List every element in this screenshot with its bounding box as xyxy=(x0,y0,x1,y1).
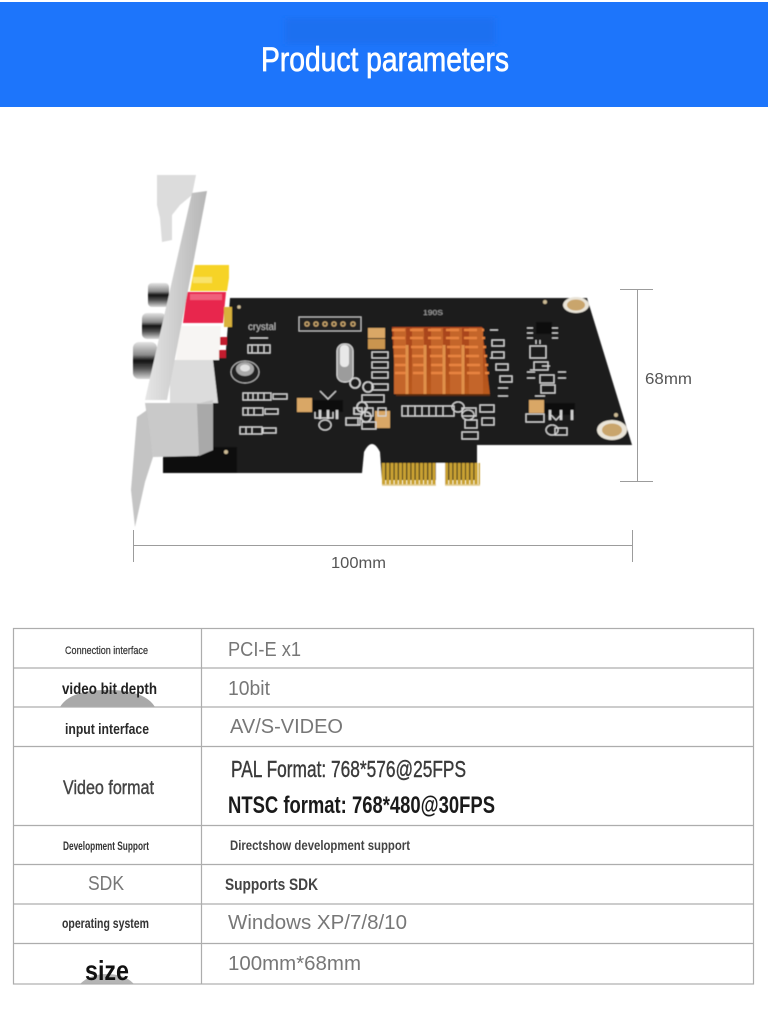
row: video format xyxy=(63,756,495,819)
row: video format: NTSC format: 768*480@30FPS xyxy=(228,792,495,819)
pin header xyxy=(299,317,361,331)
row: video bit depth: video bit depth xyxy=(62,681,157,698)
dimension: width 100mm xyxy=(133,530,633,572)
row: video bit depth: 10bit xyxy=(228,678,270,700)
row: connection interface xyxy=(65,639,301,661)
row: SDK: SDK xyxy=(88,873,125,895)
dimension: height 68mm: 68mm xyxy=(645,371,692,388)
dimension: height 68mm xyxy=(620,289,692,482)
row: video bit depth xyxy=(62,678,270,700)
red connector xyxy=(183,292,226,323)
dimension: width 100mm: 100mm xyxy=(331,555,386,572)
row: development support xyxy=(63,837,410,853)
row: development support: Development Support xyxy=(63,839,149,853)
header banner xyxy=(0,2,768,107)
row: input interface: AV/S-VIDEO xyxy=(230,716,343,738)
yellow jumper and red components xyxy=(219,307,232,358)
row: size: 100mm*68mm xyxy=(228,953,361,975)
table grid xyxy=(13,628,754,984)
mounting holes xyxy=(224,297,627,454)
row: operating system xyxy=(62,912,407,934)
S-video housing xyxy=(145,360,218,457)
gold fingers xyxy=(382,463,480,485)
row: SDK xyxy=(88,873,319,895)
row: video format: PAL Format: 768*576@25FPS xyxy=(231,756,466,782)
row: operating system: operating system xyxy=(62,915,149,931)
row: input interface: input interface xyxy=(65,721,149,738)
bracket tab xyxy=(157,175,196,242)
row: development support: Directshow development support xyxy=(230,837,410,853)
surface-mount silkscreen components xyxy=(240,328,567,439)
row: operating system: Windows XP/7/8/10 xyxy=(228,912,407,934)
voltage regulators xyxy=(313,322,575,420)
row: video format: Video format xyxy=(63,778,155,799)
row: connection interface: Connection interface xyxy=(65,645,148,657)
heat sink xyxy=(392,327,490,395)
bracket foot xyxy=(131,410,153,527)
title: Product parameters xyxy=(261,41,509,79)
row: size xyxy=(85,953,361,986)
RCA jacks xyxy=(133,283,169,379)
circuit board xyxy=(213,298,632,480)
crystal oscillator xyxy=(337,344,353,382)
parameters table xyxy=(13,628,754,986)
cell shadows xyxy=(60,690,155,984)
row: SDK: Supports SDK xyxy=(225,875,319,894)
tantalum capacitors xyxy=(297,328,544,428)
bracket strip xyxy=(145,191,207,400)
row: connection interface: PCI-E x1 xyxy=(228,639,301,661)
white connector xyxy=(176,326,221,360)
silkscreen label: crystal: crystal xyxy=(248,322,276,333)
yellow connector xyxy=(190,265,229,291)
product photo: PCI-E capture card xyxy=(131,175,632,527)
screw xyxy=(231,361,259,383)
silkscreen label: board code: 190S xyxy=(423,310,443,317)
row: input interface xyxy=(65,716,343,738)
row: size: size xyxy=(85,955,129,986)
